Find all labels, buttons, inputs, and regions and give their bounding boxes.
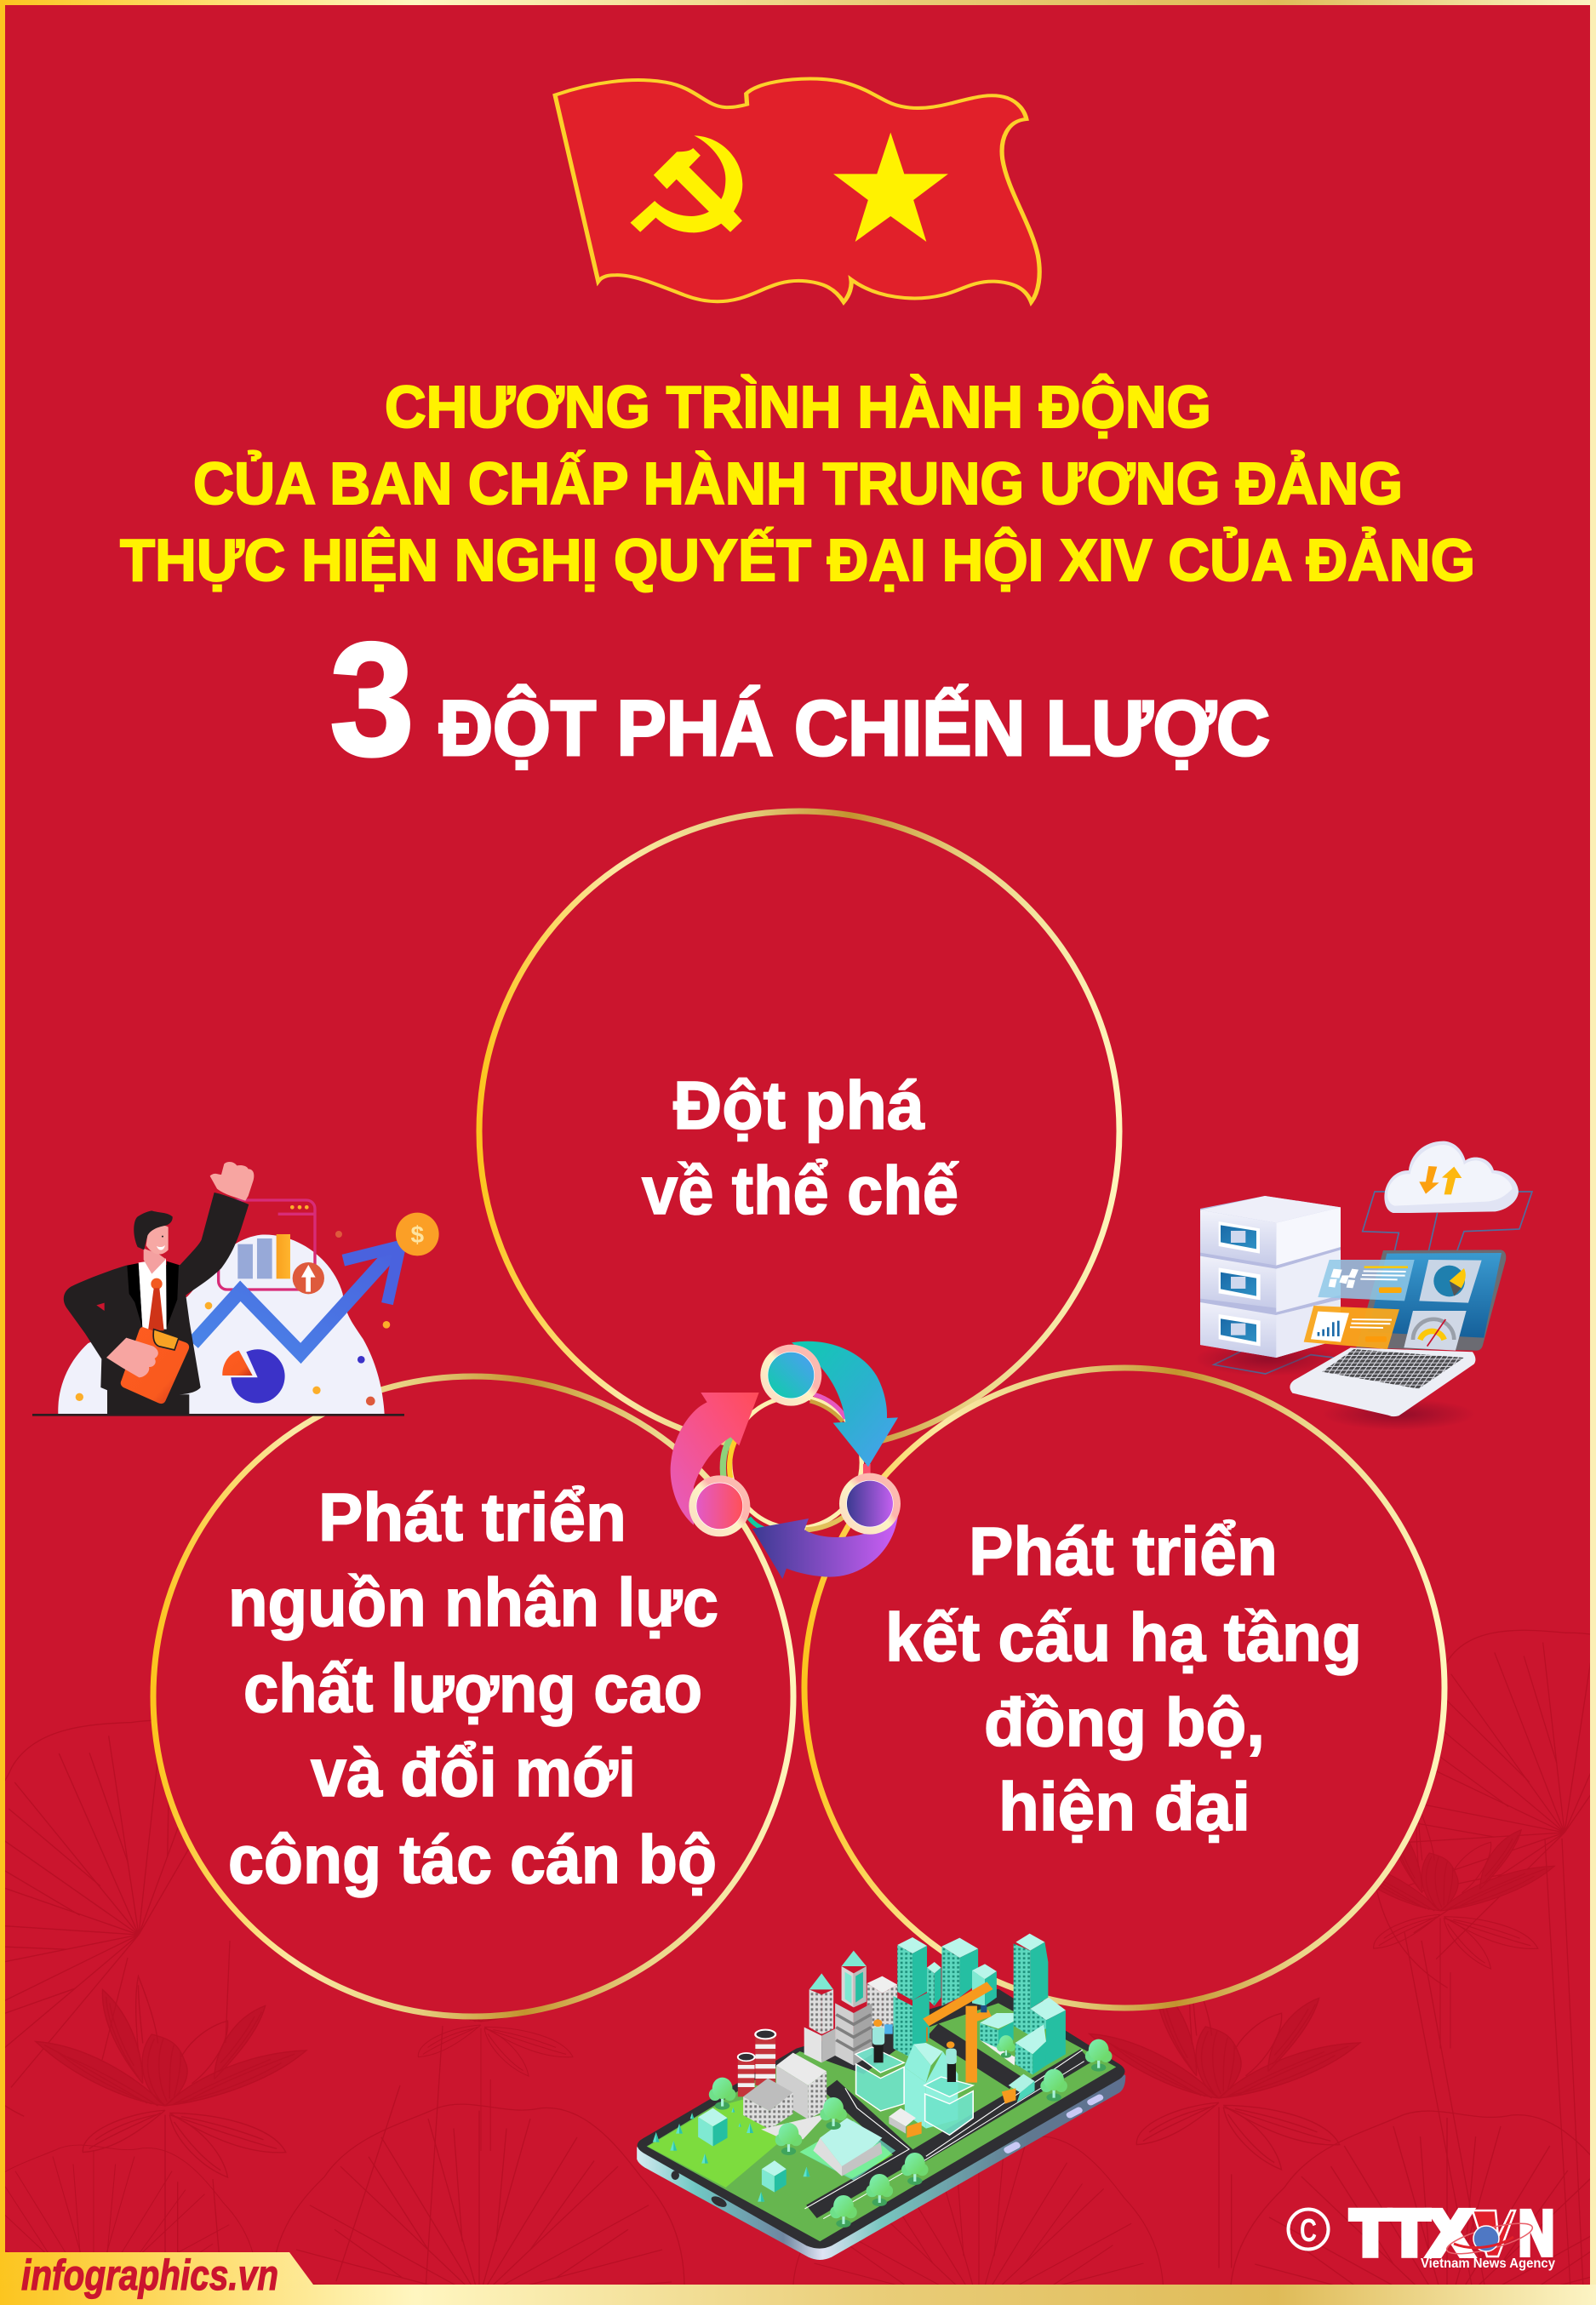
panel: infrastructure circle: hiện đại bbox=[998, 1769, 1250, 1845]
logo: copyright and TTXVN bbox=[1289, 2198, 1555, 2271]
connector lines bbox=[1214, 1192, 1532, 1374]
data card: blue bbox=[1318, 1260, 1415, 1301]
coin: $ bbox=[410, 1221, 424, 1248]
panel: institutions circle bbox=[479, 811, 1119, 1451]
chart window bbox=[219, 1200, 324, 1294]
panel: infrastructure circle: kết cấu hạ tầng bbox=[885, 1599, 1362, 1675]
panel: infrastructure circle: Phát triển bbox=[969, 1513, 1278, 1589]
arrow: teal bbox=[792, 1341, 898, 1467]
factory and chimneys bbox=[738, 2030, 827, 2139]
agency name: TTX bbox=[1351, 2198, 1472, 2268]
panel: institutions circle: Đột phá bbox=[673, 1067, 925, 1143]
background blob bbox=[58, 1235, 385, 1414]
warehouse bbox=[800, 2118, 895, 2181]
node: teal bbox=[760, 1345, 821, 1406]
ground line bbox=[32, 1414, 404, 1416]
laptop base bbox=[1290, 1347, 1475, 1416]
grey towers bbox=[804, 1951, 897, 2066]
phone body bbox=[637, 2000, 1125, 2260]
illustration: server, cloud and laptop bbox=[1194, 1141, 1532, 1430]
title: THỰC HIỆN NGHỊ QUYẾT ĐẠI HỘI XIV CỦA ĐẢNG bbox=[120, 526, 1475, 593]
scaffolding bbox=[855, 2047, 973, 2135]
trees and cones bbox=[653, 2035, 1112, 2228]
icon: cycle of three arrows bbox=[671, 1341, 901, 1579]
pie chart bbox=[222, 1349, 285, 1404]
globe bbox=[1444, 2217, 1535, 2260]
icon: star bbox=[833, 133, 948, 242]
lotus watermark pattern bbox=[0, 1552, 1596, 2305]
title bbox=[120, 373, 1475, 593]
ground bbox=[647, 2003, 1116, 2241]
clipboard bbox=[121, 1327, 189, 1404]
roads bbox=[811, 2030, 1086, 2211]
panel: human resources circle: chất lượng cao bbox=[243, 1650, 702, 1726]
panel: human resources circle: Phát triển bbox=[318, 1479, 626, 1555]
flag cloth bbox=[555, 79, 1039, 302]
node: pink bbox=[689, 1475, 750, 1536]
laptop screen bbox=[1356, 1250, 1506, 1351]
arrow: purple bbox=[752, 1515, 898, 1579]
panel: human resources circle bbox=[153, 1376, 793, 2016]
teal towers bbox=[893, 1934, 1066, 2129]
coin bbox=[396, 1213, 439, 1255]
heading: 3 strategic breakthroughs: ĐỘT PHÁ CHIẾN LƯỢC bbox=[439, 684, 1270, 772]
panel: human resources circle: nguồn nhân lực bbox=[228, 1564, 718, 1640]
panel: institutions circle: về thể chế bbox=[642, 1152, 958, 1228]
trucks bbox=[889, 2074, 1035, 2138]
icon: hammer and sickle bbox=[631, 135, 742, 232]
workers bbox=[872, 2019, 957, 2082]
logo: copyright and TTXVN: Vietnam News Agency bbox=[1421, 2256, 1555, 2271]
raised fist bbox=[210, 1162, 254, 1201]
cloud bbox=[1384, 1141, 1519, 1213]
heading: 3 strategic breakthroughs: 3 bbox=[329, 609, 415, 790]
copyright mark bbox=[1289, 2210, 1328, 2249]
server stack bbox=[1200, 1196, 1341, 1358]
crane bbox=[926, 1986, 990, 2083]
node: purple bbox=[839, 1473, 901, 1535]
panel: infrastructure circle bbox=[804, 1368, 1444, 2008]
red V bbox=[1473, 2211, 1515, 2256]
panel: human resources circle: công tác cán bộ bbox=[228, 1822, 717, 1897]
footer brand text: infographics.vn bbox=[21, 2251, 278, 2299]
logo: copyright and TTXVN: N bbox=[1519, 2198, 1554, 2268]
heading: 3 strategic breakthroughs bbox=[329, 609, 1270, 790]
man bbox=[64, 1162, 254, 1414]
data card: orange bbox=[1304, 1306, 1399, 1349]
copyright mark: C bbox=[1300, 2213, 1317, 2249]
small teal cubes bbox=[698, 2108, 787, 2193]
circle fills bbox=[153, 811, 1444, 2016]
title: CỦA BAN CHẤP HÀNH TRUNG ƯƠNG ĐẢNG bbox=[193, 449, 1403, 517]
hand bbox=[106, 1338, 158, 1377]
trend arrow bbox=[193, 1246, 400, 1353]
title: CHƯƠNG TRÌNH HÀNH ĐỘNG bbox=[385, 373, 1211, 440]
illustration: smart city on a phone bbox=[637, 1934, 1125, 2260]
footer band bbox=[0, 2252, 1596, 2305]
panel: infrastructure circle: đồng bộ, bbox=[984, 1684, 1265, 1760]
flag bbox=[555, 79, 1039, 302]
illustration: businessman with chart bbox=[32, 1162, 439, 1416]
arrow: pink bbox=[671, 1393, 759, 1525]
panel: human resources circle: và đổi mới bbox=[311, 1735, 636, 1810]
